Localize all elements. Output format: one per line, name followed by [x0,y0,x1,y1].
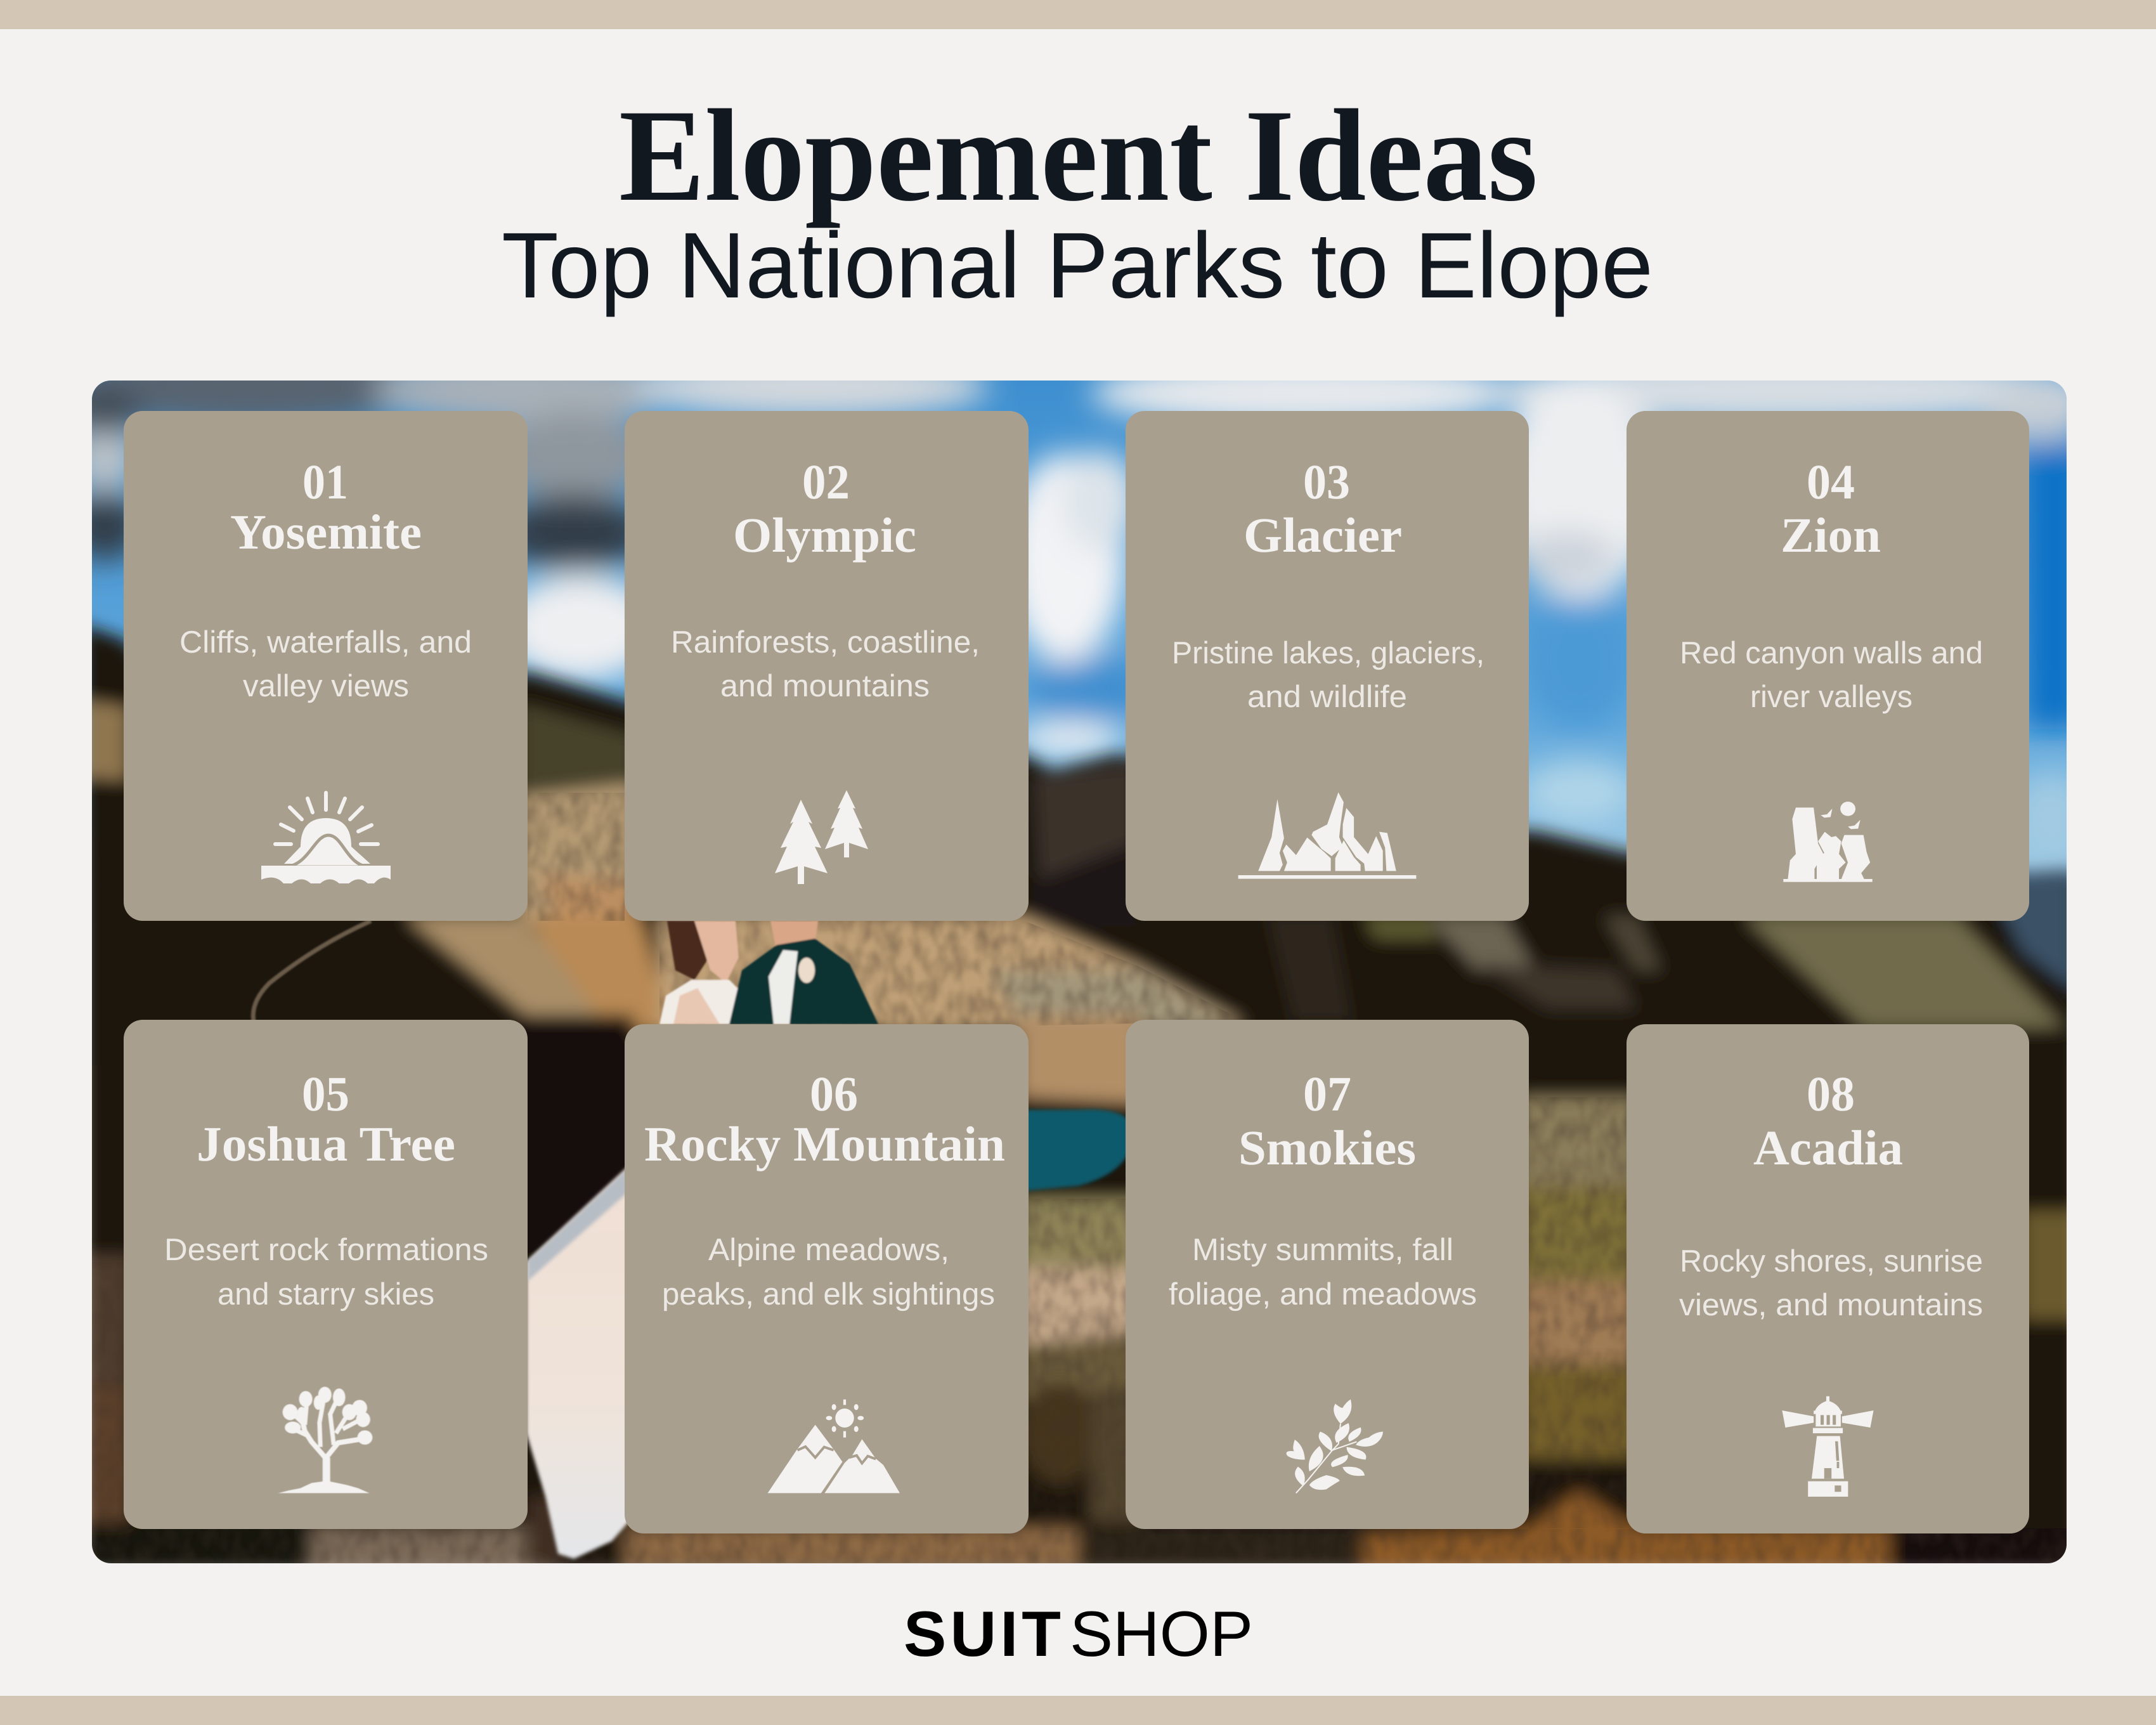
name Yosemite: Yosemite [230,504,422,559]
card 03: Glacier [1126,411,1529,921]
card 01: Yosemite [124,411,528,921]
description: and wildlife [1247,680,1407,714]
card 08: Acadia [1627,1024,2029,1533]
description: Cliffs, waterfalls, and [179,625,472,660]
icon: sunrise over mountains and water [261,793,391,883]
bottom band [0,1696,2156,1725]
rocks [92,1244,124,1386]
description: Pristine lakes, glaciers, [1172,636,1484,670]
number 02: 02 [802,454,850,509]
description [179,625,472,703]
description: river valleys [1750,680,1912,714]
number 04: 04 [1807,454,1855,509]
logo: SUITSHOP: SHOP [1070,1599,1253,1670]
icon: joshua tree [278,1387,372,1493]
description [1679,1244,1983,1322]
title: Elopement Ideas [619,82,1538,228]
description [1680,636,1983,714]
olive slopes on right [1363,916,1439,939]
logo: SUITSHOP [904,1599,1253,1670]
logo: SUITSHOP: SUIT [904,1599,1061,1670]
icon: pine trees [775,790,868,884]
description: and starry skies [218,1277,434,1312]
icon: canyon rock pillars with birds [1783,802,1873,882]
number 05: 05 [302,1066,349,1121]
name Acadia: Acadia [1753,1120,1903,1175]
name Smokies: Smokies [1238,1120,1416,1175]
icon: lighthouse [1782,1396,1874,1497]
subtitle: Top National Parks to Elope [502,214,1653,318]
name Joshua Tree: Joshua Tree [197,1116,455,1171]
description [1169,1233,1477,1312]
description: valley views [243,669,409,703]
description [164,1233,488,1312]
description: Rocky shores, sunrise [1680,1244,1983,1279]
description: Desert rock formations [164,1233,488,1267]
card 07: Smokies [1126,1020,1529,1529]
top band [0,0,2156,29]
icon: leafy branch [1287,1400,1383,1493]
card 05: Joshua Tree [124,1020,528,1529]
tan diagonal band left of couple [396,913,609,1032]
number 07: 07 [1303,1066,1351,1121]
sky clouds [57,349,438,425]
description: Alpine meadows, [708,1233,949,1267]
card 02: Olympic [625,411,1029,921]
sunny meadow right of couple [659,916,1244,1034]
card 04: Zion [1627,411,2029,921]
description: Red canyon walls and [1680,636,1983,670]
description [662,1233,995,1312]
number 01: 01 [302,454,348,509]
description [671,625,980,703]
icon: mountains with sun [768,1400,900,1493]
description [1172,636,1484,714]
description: and mountains [720,669,930,703]
lake [1029,1107,1126,1192]
description: Misty summits, fall [1192,1233,1453,1267]
icon: jagged glacier peaks [1238,792,1416,879]
number 08: 08 [1807,1066,1855,1121]
mountain trail [253,921,371,1021]
description: Rainforests, coastline, [671,625,980,660]
panel: background photo of couple in mountain landscape [57,349,2093,1573]
description: peaks, and elk sightings [662,1277,995,1312]
lower slopes [520,1015,634,1262]
description: foliage, and meadows [1169,1277,1477,1312]
wedding dress [526,1167,634,1559]
mountains and slopes [82,625,2080,1573]
rock texture [92,761,2067,1563]
name Rocky Mountain: Rocky Mountain [644,1116,1005,1171]
number 03: 03 [1303,454,1350,509]
name Glacier: Glacier [1244,507,1402,563]
card 06: Rocky Mountain [625,1024,1029,1533]
couple [659,921,878,1024]
name Zion: Zion [1781,507,1881,563]
number 06: 06 [810,1066,858,1121]
description: views, and mountains [1679,1288,1983,1322]
name Olympic: Olympic [733,507,916,563]
